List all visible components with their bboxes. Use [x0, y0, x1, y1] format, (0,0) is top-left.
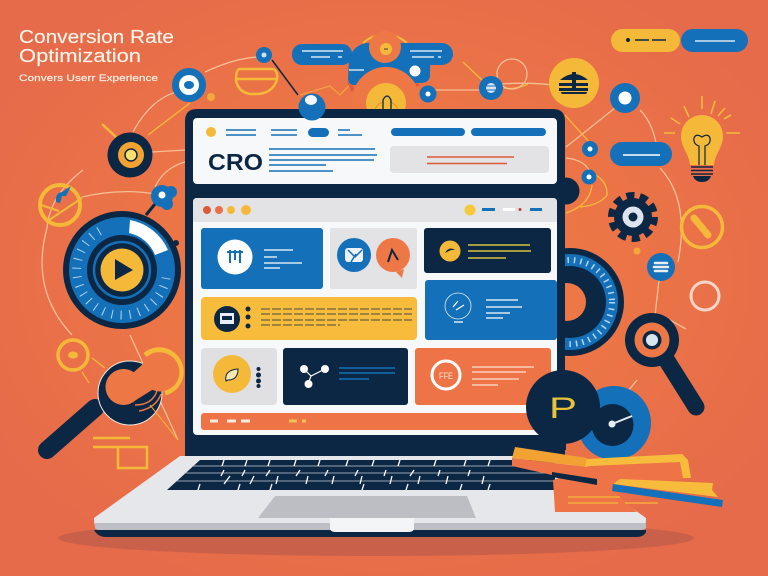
- title: Conversion Rate: [19, 26, 174, 47]
- icon: blue stripes node: [647, 253, 675, 281]
- light ring: [691, 282, 719, 310]
- icon: left ring with blue tag: [40, 185, 82, 225]
- icon: yellow bulb behind laptop: [366, 83, 406, 123]
- main page panel: [193, 198, 557, 435]
- footer bar: [201, 413, 541, 430]
- right dial: [516, 248, 624, 356]
- card: dark nodes: [283, 348, 408, 405]
- icon: light bulb: [664, 96, 740, 182]
- P badge and gauge: [526, 370, 651, 460]
- P badge and gauge: P: [549, 392, 577, 425]
- icon: top-left target node: [172, 68, 215, 102]
- icon: orange target node: [102, 124, 152, 178]
- yellow pill and blue pill: [611, 29, 748, 52]
- card: grey leaf: [201, 348, 277, 405]
- header panel: [193, 118, 557, 184]
- big blue ball on frame: [298, 94, 326, 120]
- top center blob: [300, 31, 453, 135]
- icon: small top node: [256, 47, 298, 95]
- folders: [512, 447, 723, 512]
- card: blue chart: [425, 280, 557, 340]
- dial with play button: [63, 211, 181, 329]
- laptop shadow: [58, 520, 694, 556]
- icon: yellow bowl: [236, 69, 277, 94]
- small nodes: [582, 141, 598, 184]
- yellow frame lines: [93, 438, 147, 468]
- card: dark with yellow icon: [424, 228, 551, 273]
- icon: yellow ring badge: [682, 206, 722, 248]
- magnifier left with yellow arc: [47, 350, 181, 450]
- blue node right: [610, 83, 640, 113]
- small blue node: [420, 86, 436, 102]
- keyboard: [167, 460, 555, 490]
- blue speech pill: [292, 44, 352, 65]
- card: yellow text: [201, 297, 417, 340]
- title: Convers Userr Experience: [19, 73, 158, 84]
- card: grey social: [330, 228, 417, 289]
- title: Optimization: [19, 45, 141, 66]
- icon: gear: [612, 196, 654, 238]
- icon: burger badge: [549, 58, 599, 108]
- trackpad: [258, 496, 476, 518]
- yellow drop: [634, 248, 640, 254]
- laptop screen frame: [185, 109, 580, 456]
- blue pill: [610, 142, 672, 166]
- title: [19, 26, 174, 84]
- laptop base: [94, 456, 646, 537]
- front notch: [330, 518, 414, 532]
- icon: yellow ring lower left: [58, 340, 105, 383]
- card: orange badge: FFE: [439, 371, 453, 381]
- CRO logo text: CRO: [208, 149, 263, 175]
- connector lines: [42, 57, 686, 440]
- icon: globe node: [479, 76, 503, 100]
- card: orange badge: [415, 348, 551, 405]
- icon: blue blob node: [146, 185, 177, 215]
- card: blue icon: [201, 228, 323, 289]
- magnifier right: [625, 313, 696, 407]
